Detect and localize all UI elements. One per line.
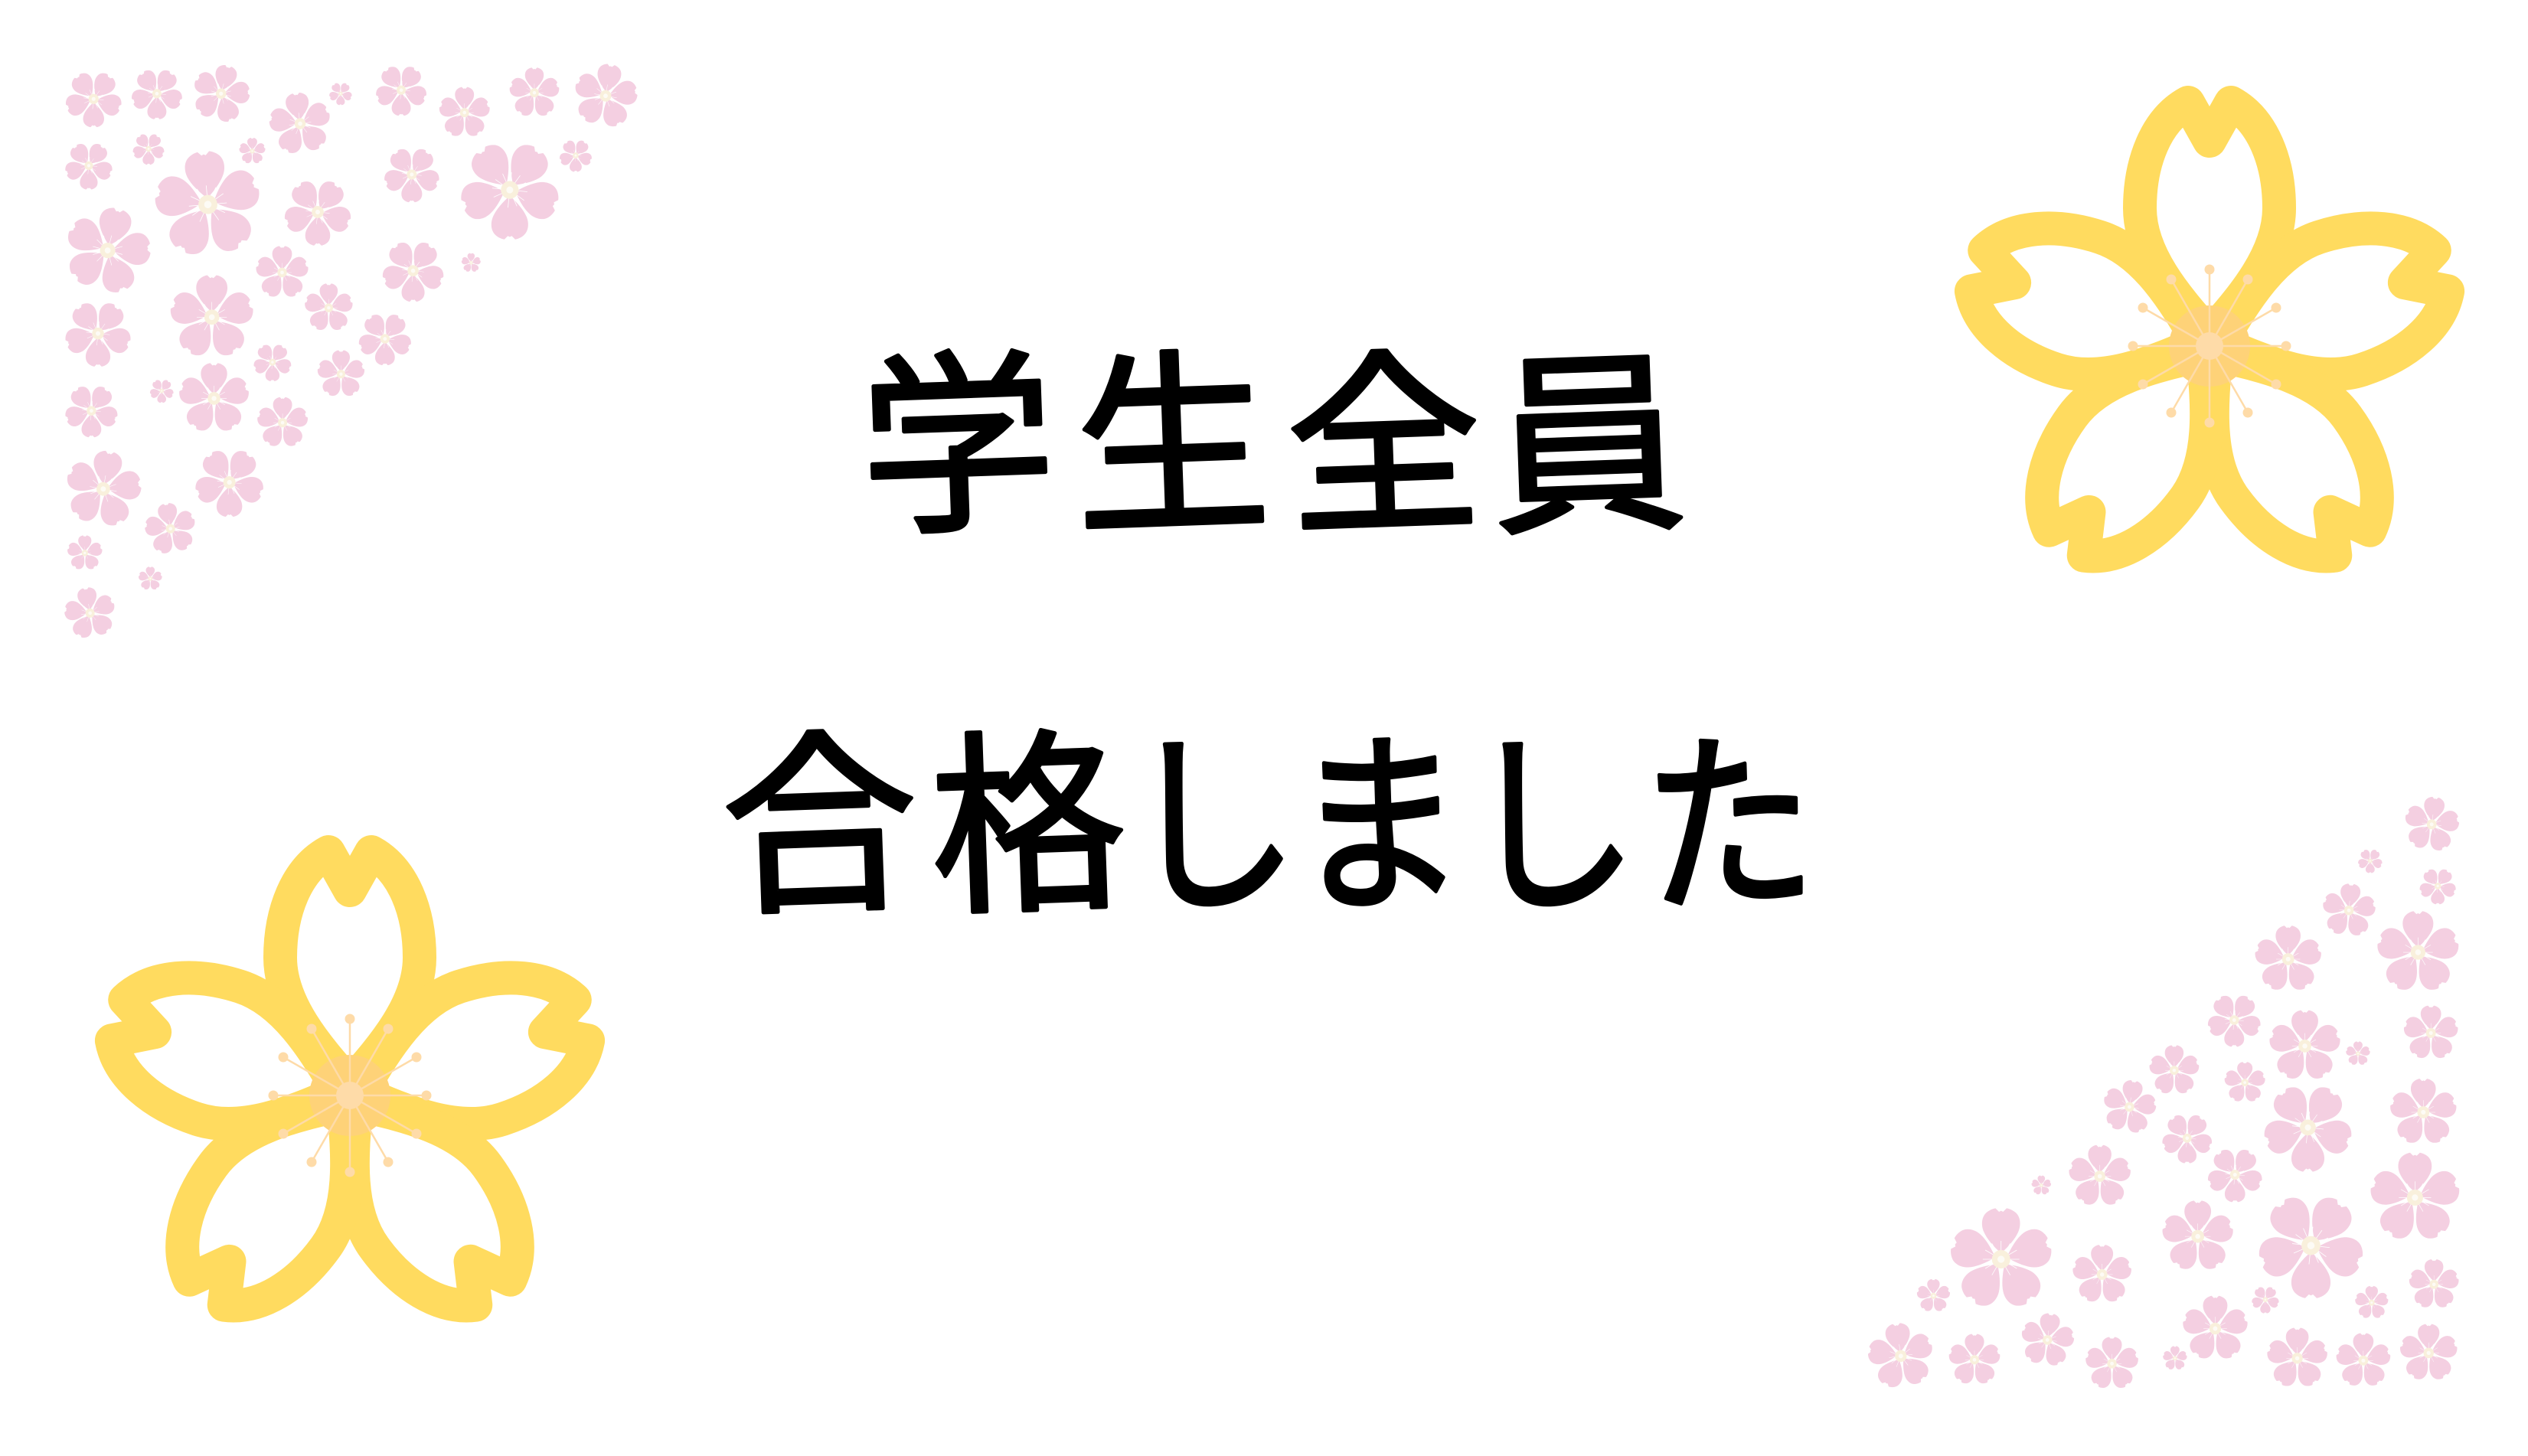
title line 2	[717, 665, 1819, 955]
title line 2: 合格	[717, 665, 1130, 955]
pink blossom cluster: bottom right	[1862, 793, 2464, 1394]
title line 2: しました	[1121, 665, 1819, 955]
icon: yellow cherry blossom, top right	[1956, 103, 2463, 584]
title text	[717, 286, 1819, 955]
pink blossom cluster: top left	[50, 54, 645, 644]
title line 1: 学生全員	[854, 286, 1690, 575]
icon: yellow cherry blossom, bottom left	[96, 852, 603, 1334]
